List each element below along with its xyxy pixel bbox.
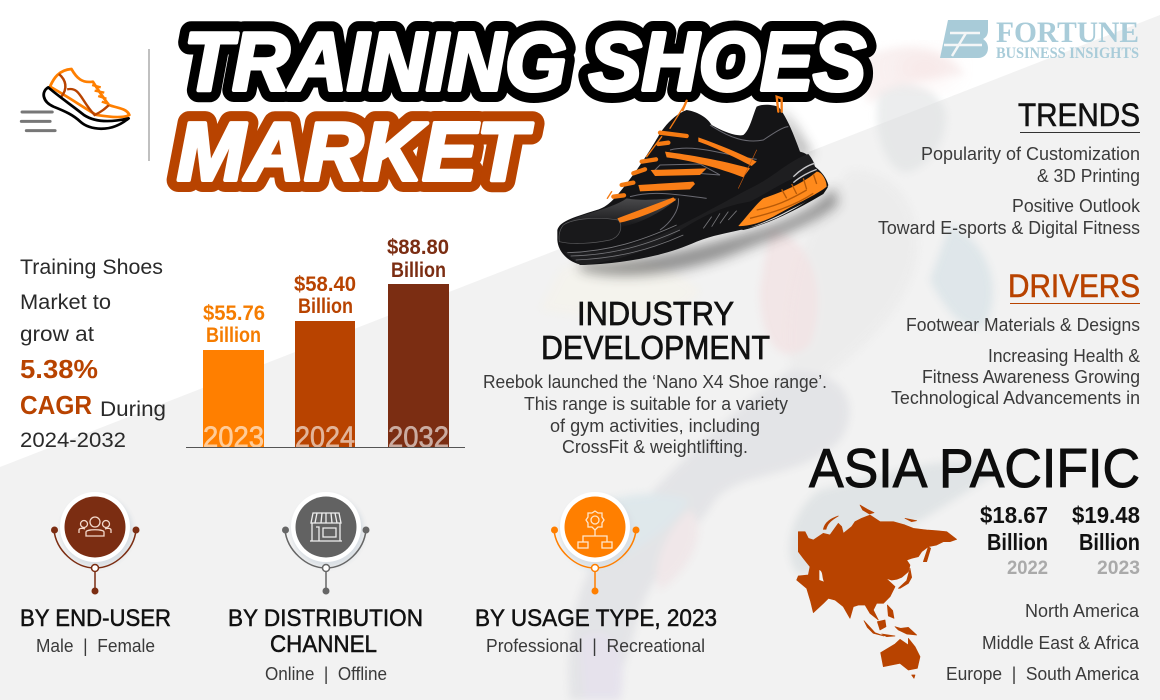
shoe upper seams bbox=[630, 125, 788, 230]
shoe illustration bbox=[557, 97, 838, 275]
value 2023: Billion bbox=[1079, 529, 1140, 555]
shoe laces bbox=[607, 97, 782, 198]
logo icon: running shoe bbox=[21, 69, 129, 131]
asia pacific values bbox=[980, 502, 1140, 579]
trends list: Popularity of Customization bbox=[921, 143, 1140, 164]
title line: training shoes: TRAINING SHOES bbox=[184, 15, 866, 108]
drivers bbox=[891, 268, 1141, 408]
trends bbox=[878, 97, 1141, 238]
segment: usage type bbox=[475, 492, 717, 656]
title line: training shoes: TRAINING SHOES bbox=[184, 15, 866, 108]
divider bbox=[148, 49, 150, 161]
icon: gear and flow bbox=[551, 492, 640, 594]
trends list: Positive Outlook bbox=[1012, 195, 1141, 216]
left text: CAGR: CAGR bbox=[20, 390, 92, 420]
bar 2023 bbox=[203, 302, 265, 454]
industry development text bbox=[483, 372, 827, 457]
drivers list bbox=[891, 314, 1141, 408]
industry development text: CrossFit & weightlifting. bbox=[562, 437, 748, 457]
icon: store bbox=[282, 492, 370, 594]
bar 2023: $55.76 bbox=[203, 302, 265, 325]
left text: CAGR: 5.38% bbox=[20, 354, 98, 384]
left text: CAGR bbox=[20, 256, 166, 452]
heading: by distribution channel bbox=[228, 605, 423, 658]
industry development text: This range is suitable for a variety bbox=[524, 394, 788, 414]
bar 2024: $58.40 bbox=[294, 273, 356, 296]
drivers list: Footwear Materials & Designs bbox=[906, 314, 1140, 335]
bar chart bbox=[186, 236, 465, 454]
shoe toe cap bbox=[559, 218, 621, 243]
shoe midsole bbox=[563, 154, 815, 265]
shoe orange heel bbox=[738, 172, 827, 226]
left text: CAGR: Training Shoes bbox=[20, 256, 163, 279]
bar 2024: 2024 bbox=[295, 421, 355, 454]
shoe vamp shading bbox=[563, 198, 677, 227]
value 2023 bbox=[1072, 502, 1140, 579]
left text: CAGR: 2024-2032 bbox=[20, 429, 126, 452]
watercolor runner silhouette bbox=[540, 47, 1000, 700]
industry development heading: INDUSTRY bbox=[577, 295, 734, 332]
shoe shadow bbox=[580, 187, 838, 275]
value 2022: $18.67 bbox=[980, 502, 1048, 528]
other regions bbox=[946, 600, 1140, 684]
trends list: Toward E-sports & Digital Fitness bbox=[878, 217, 1140, 238]
title line: market: MARKET bbox=[177, 105, 533, 198]
bar 2024: Billion bbox=[298, 295, 353, 318]
logo wordmark: FORTUNE bbox=[996, 16, 1139, 49]
industry development heading bbox=[541, 295, 770, 366]
value 2023: 2023 bbox=[1097, 558, 1140, 579]
asia pacific map bbox=[797, 505, 957, 678]
items: professional recreational: Professional | Recreational bbox=[486, 636, 705, 656]
trends list: & 3D Printing bbox=[1037, 165, 1140, 186]
industry development heading: DEVELOPMENT bbox=[541, 329, 770, 366]
value 2022: 2022 bbox=[1007, 558, 1048, 579]
bar 2023: 2023 bbox=[203, 421, 264, 454]
other regions: Middle East & Africa bbox=[982, 632, 1140, 653]
value 2022: Billion bbox=[987, 529, 1048, 555]
items: online offline: Online | Offline bbox=[265, 664, 387, 684]
title line: market: MARKET bbox=[177, 105, 533, 198]
bar 2024 bbox=[294, 273, 356, 454]
heading: by end-user: BY END-USER bbox=[20, 605, 171, 632]
shoe body bbox=[557, 105, 828, 265]
brand logo bbox=[940, 16, 1139, 62]
title bbox=[177, 15, 866, 198]
asia pacific heading: ASIA PACIFIC bbox=[809, 437, 1140, 499]
drivers heading: DRIVERS bbox=[1008, 268, 1140, 304]
logo wordmark: BUSINESS INSIGHTS bbox=[996, 45, 1139, 62]
other regions: North America bbox=[1025, 600, 1140, 621]
industry development text: of gym activities, including bbox=[550, 416, 760, 436]
bar 2032 bbox=[387, 236, 449, 454]
bar 2032: $88.80 bbox=[387, 236, 449, 259]
drivers list: Technological Advancements in bbox=[891, 387, 1140, 408]
left text: CAGR: grow at bbox=[20, 323, 94, 346]
industry development text: Reebok launched the ‘Nano X4 Shoe range’. bbox=[483, 372, 827, 392]
segment: distribution channel bbox=[228, 492, 423, 684]
drivers list: Increasing Health & bbox=[988, 345, 1141, 366]
trends heading: TRENDS bbox=[1018, 97, 1140, 133]
bar 2023: Billion bbox=[206, 324, 261, 347]
segment: end-user bbox=[20, 492, 171, 656]
items: male female: Male | Female bbox=[36, 636, 155, 656]
heading: by distribution channel: BY DISTRIBUTION bbox=[228, 605, 423, 632]
heading: by usage type: BY USAGE TYPE, 2023 bbox=[475, 605, 717, 632]
value 2022 bbox=[980, 502, 1048, 579]
heading: by distribution channel: CHANNEL bbox=[270, 631, 377, 658]
icon: people bbox=[51, 492, 140, 594]
trends list bbox=[878, 143, 1141, 238]
drivers list: Fitness Awareness Growing bbox=[922, 366, 1140, 387]
left text: CAGR: During bbox=[100, 398, 166, 421]
bar 2032: Billion bbox=[391, 259, 446, 282]
value 2023: $19.48 bbox=[1072, 502, 1140, 528]
other regions: Europe | South America bbox=[946, 663, 1140, 684]
logo mark bbox=[940, 20, 988, 58]
bar 2032: 2032 bbox=[388, 421, 449, 454]
shoe orange stripes bbox=[617, 137, 757, 223]
left text: CAGR: Market to bbox=[20, 291, 111, 314]
